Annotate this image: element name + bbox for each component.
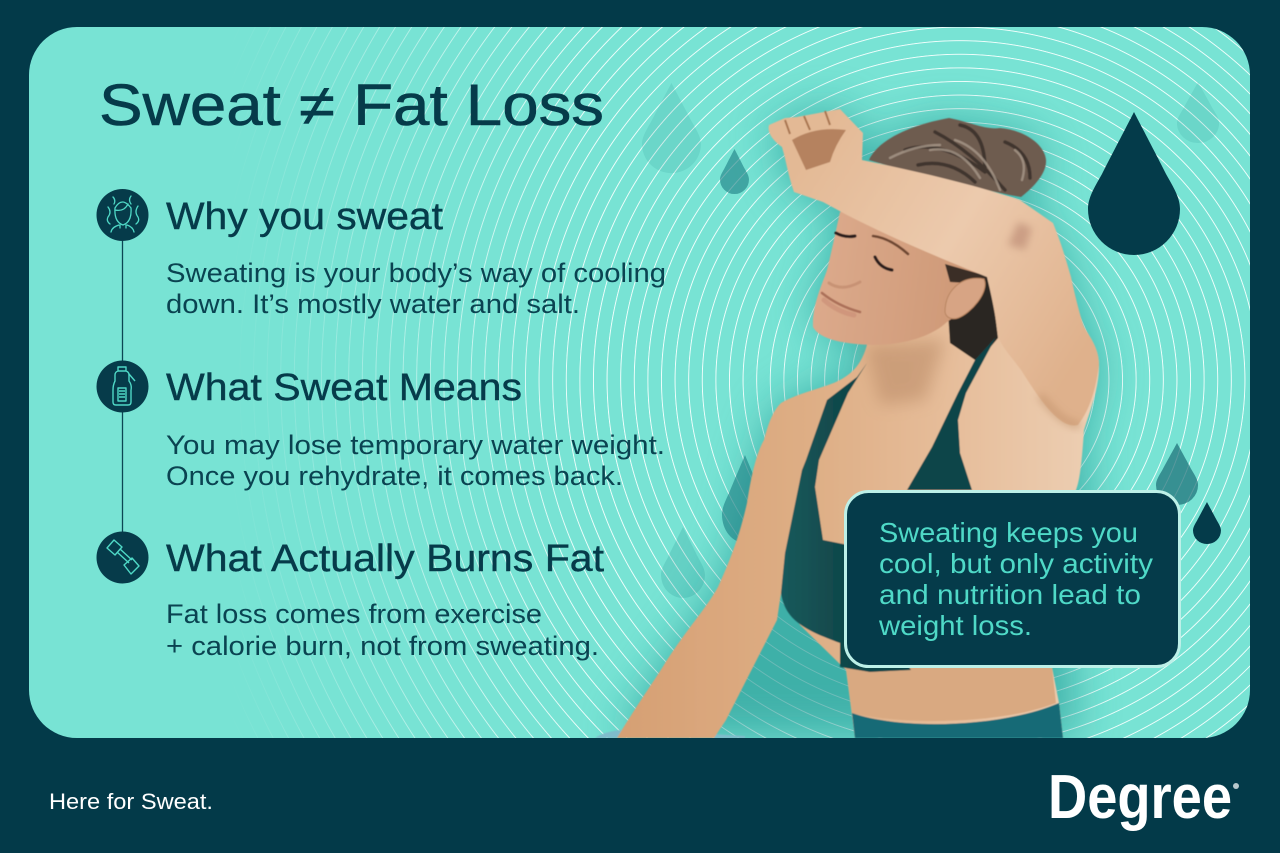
icon: teal drop right [1156,443,1198,505]
callout: sweating keeps you cool: weight loss. [878,610,1032,641]
hair above ear [945,264,987,284]
body text: Sweating is your body’s way of cooling [166,258,666,288]
hair bun [869,118,1046,197]
heading: What Actually Burns Fat [166,538,604,580]
face [812,211,979,346]
logo: Degree: Degree [1048,763,1232,832]
body: torso and left arm [616,318,1100,738]
illustration: woman wiping forehead [595,109,1099,738]
heading: What Sweat Means [166,367,522,409]
heading: Why you sweat [166,196,443,238]
neck shading [865,340,945,405]
callout: sweating keeps you cool: Sweating keeps you [879,517,1138,548]
panel: main teal card [29,27,1250,738]
body text: Once you rehydrate, it comes back. [166,461,623,491]
body text [166,430,665,491]
connector line [122,241,124,532]
title: Sweat ≠ Fat Loss [99,73,604,138]
callout: sweating keeps you cool: and nutrition lead to [879,579,1141,610]
icon: dumbbell [96,532,148,584]
body text: down. It’s mostly water and salt. [166,289,580,319]
lower-torso shading [846,667,1056,721]
tagline: Here for Sweat. [49,789,213,814]
icon: mid teal drop [722,455,753,541]
icon: faint drop top centre [642,83,701,173]
icon: small dark drop right [1193,502,1221,544]
ear [945,278,985,319]
callout: sweating keeps you cool [846,492,1180,666]
section: what actually burns fat [96,532,604,661]
hair behind neck [948,276,998,360]
body text [166,258,666,319]
palm and finger shading [792,129,846,170]
soft shadow behind figure [617,108,1099,738]
armpit crease [1040,395,1080,425]
bra [781,337,996,672]
section: what sweat means [96,360,665,491]
legs hint at bottom [595,730,745,738]
body text [166,599,599,661]
icon: small teal drop [720,149,749,194]
icon: large dark drop [1088,112,1180,255]
body text: Fat loss comes from exercise [166,599,542,629]
icon: faint drop top right [1177,82,1219,143]
icon: sweating face [96,189,148,241]
body text: You may lose temporary water weight. [166,430,665,460]
facial features: eyes, brow, nose, lips [822,233,908,315]
section: why you sweat [96,189,666,319]
icon: faint drop lower [661,527,705,598]
raised arm and hand [769,109,1099,426]
elbow detail [1008,222,1032,250]
callout: sweating keeps you cool: cool, but only activity [879,548,1153,579]
hair strands [890,125,1030,190]
shorts [852,703,1063,738]
icon: water bottle [96,360,148,412]
body text: + calorie burn, not from sweating. [166,631,599,661]
